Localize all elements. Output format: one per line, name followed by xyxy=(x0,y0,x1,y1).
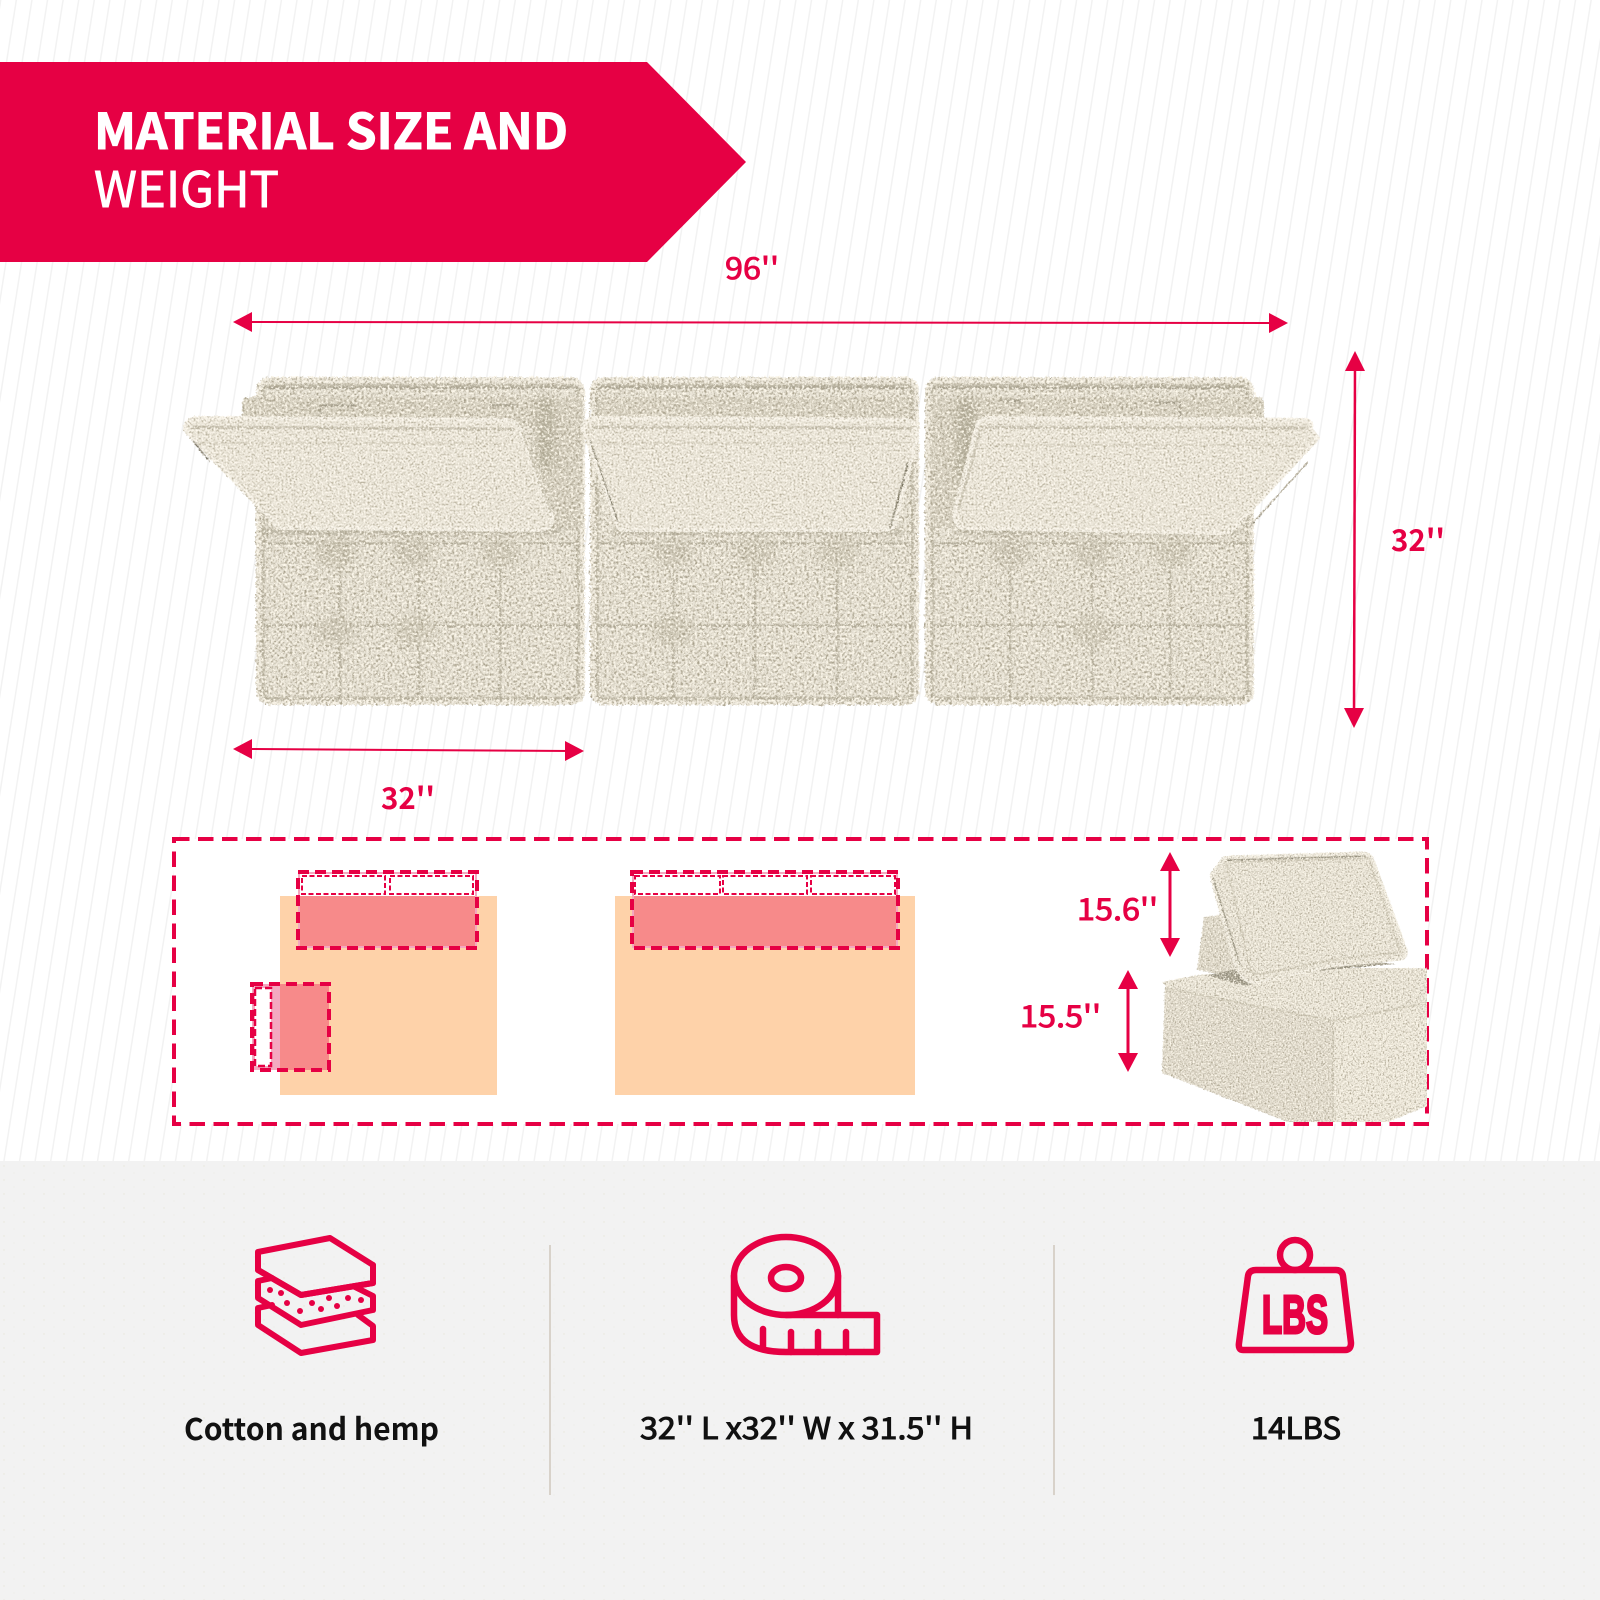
sofa module 1 pillow xyxy=(185,418,552,530)
chair front left face xyxy=(1162,986,1333,1124)
sofa module 2 pillow xyxy=(582,418,917,530)
dimension: single module width 32 inches xyxy=(233,739,584,818)
rug 1 xyxy=(280,896,497,1095)
sofa footprint xyxy=(632,872,898,948)
armchair module xyxy=(1162,853,1430,1124)
label: material: Cotton and hemp xyxy=(184,1405,439,1449)
dimension: seat height 15.5 inches: 15.5'' xyxy=(1020,992,1101,1036)
dimension: total width 96 inches xyxy=(233,244,1288,333)
top sofa footprint xyxy=(298,872,477,948)
icon: LBS weight xyxy=(1239,1240,1351,1350)
dimension: back height 15.6 inches xyxy=(1077,852,1180,957)
dimension: single module width 32 inches: 32'' xyxy=(381,774,435,818)
dimension: back height 15.6 inches: 15.6'' xyxy=(1077,885,1158,929)
chair wedge back xyxy=(1196,914,1236,974)
rug 2 xyxy=(615,896,915,1095)
layout panel: dashed frame xyxy=(174,839,1430,1124)
dimension: seat height 15.5 inches xyxy=(1020,970,1138,1072)
dimension: depth 32 inches xyxy=(1344,351,1445,728)
icon: foam layers xyxy=(258,1238,373,1353)
label: weight: 14LBS xyxy=(1251,1404,1341,1448)
sofa top view xyxy=(185,377,1318,705)
sofa module 3 seat xyxy=(925,377,1264,705)
side sofa footprint xyxy=(252,984,329,1070)
spec divider left xyxy=(549,1245,551,1495)
spec: weight xyxy=(1239,1240,1351,1448)
chair pillow xyxy=(1211,853,1406,982)
chair right face xyxy=(1333,1002,1430,1124)
icon: LBS weight: LBS xyxy=(1262,1285,1328,1345)
label: size: 32'' L x32'' W x 31.5'' H xyxy=(640,1404,973,1448)
specs panel background xyxy=(0,1161,1600,1600)
spec: material xyxy=(184,1238,439,1449)
title banner: WEIGHT xyxy=(94,151,279,222)
layout 1: room with L arrangement xyxy=(252,872,497,1095)
sofa module 2 seat xyxy=(590,377,919,705)
title banner: MATERIAL SIZE AND xyxy=(94,93,568,164)
dimension: depth 32 inches: 32'' xyxy=(1391,516,1445,560)
spec: size xyxy=(640,1237,973,1448)
icon: tape measure xyxy=(734,1237,877,1352)
chair seat top xyxy=(1162,968,1430,1020)
sofa module 3 pillow xyxy=(955,418,1318,533)
pillow shadows xyxy=(262,528,1238,534)
background stripes xyxy=(0,0,1600,1161)
dimension: total width 96 inches: 96'' xyxy=(725,244,779,288)
title banner xyxy=(0,62,746,262)
spec divider right xyxy=(1053,1245,1055,1495)
sofa module 1 seat xyxy=(242,377,585,705)
layout 2: room with straight arrangement xyxy=(615,872,915,1095)
